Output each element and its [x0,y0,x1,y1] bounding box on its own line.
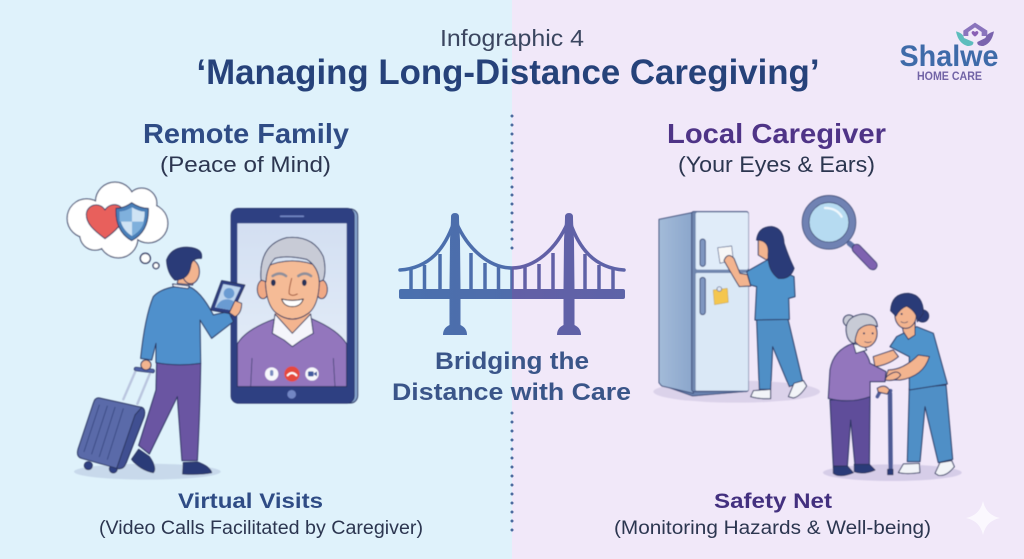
heading: Remote Family [143,118,349,177]
icon: caregiver helping elderly woman with cane [823,293,962,481]
logo icon [956,23,994,46]
heading: Local Caregiver: (Your Eyes & Ears) [678,152,875,177]
caption: Bridging the Distance with Care: Bridging the [435,348,589,375]
heading: Remote Family: Remote Family [143,118,349,149]
illustration caption: Safety Net: Safety Net [714,490,832,513]
title block: Infographic 4 [440,25,584,51]
icon: large tablet with video call [231,208,358,403]
title block: ‘Managing Long-Distance Caregiving’ [196,53,820,92]
icon: man with suitcase [74,247,245,480]
heading: Remote Family: (Peace of Mind) [160,152,331,177]
title block [196,25,820,92]
logo: Shalwe Home Care [900,23,998,83]
icon: thought cloud with heart and shield [67,182,168,269]
caption: Bridging the Distance with Care: Distance with Care [392,379,631,406]
icon: caregiver at the fridge [724,227,807,399]
caption: Bridging the Distance with Care [392,348,631,406]
icon: sparkle watermark [966,501,1000,535]
logo: Shalwe Home Care: HOME CARE [917,69,982,83]
heading: Local Caregiver: Local Caregiver [667,118,886,149]
illustration caption: Virtual Visits [99,490,423,539]
illustration caption: Virtual Visits: (Video Calls Facilitated by Caregiver) [99,518,423,539]
illustration caption: Virtual Visits: Virtual Visits [178,490,323,513]
illustration: remote family [67,182,358,480]
logo: Shalwe Home Care: Shalwe [900,40,998,73]
icon: suspension bridge [399,213,625,335]
illustration: local caregiver [653,199,962,481]
icon: magnifying glass [806,199,873,265]
heading: Local Caregiver [667,118,886,177]
background: right panel [512,0,1024,559]
illustration caption: Safety Net: (Monitoring Hazards & Well-being) [614,518,931,539]
illustration caption: Safety Net [614,490,931,539]
icon: refrigerator [653,212,820,403]
background: left panel [0,0,512,559]
